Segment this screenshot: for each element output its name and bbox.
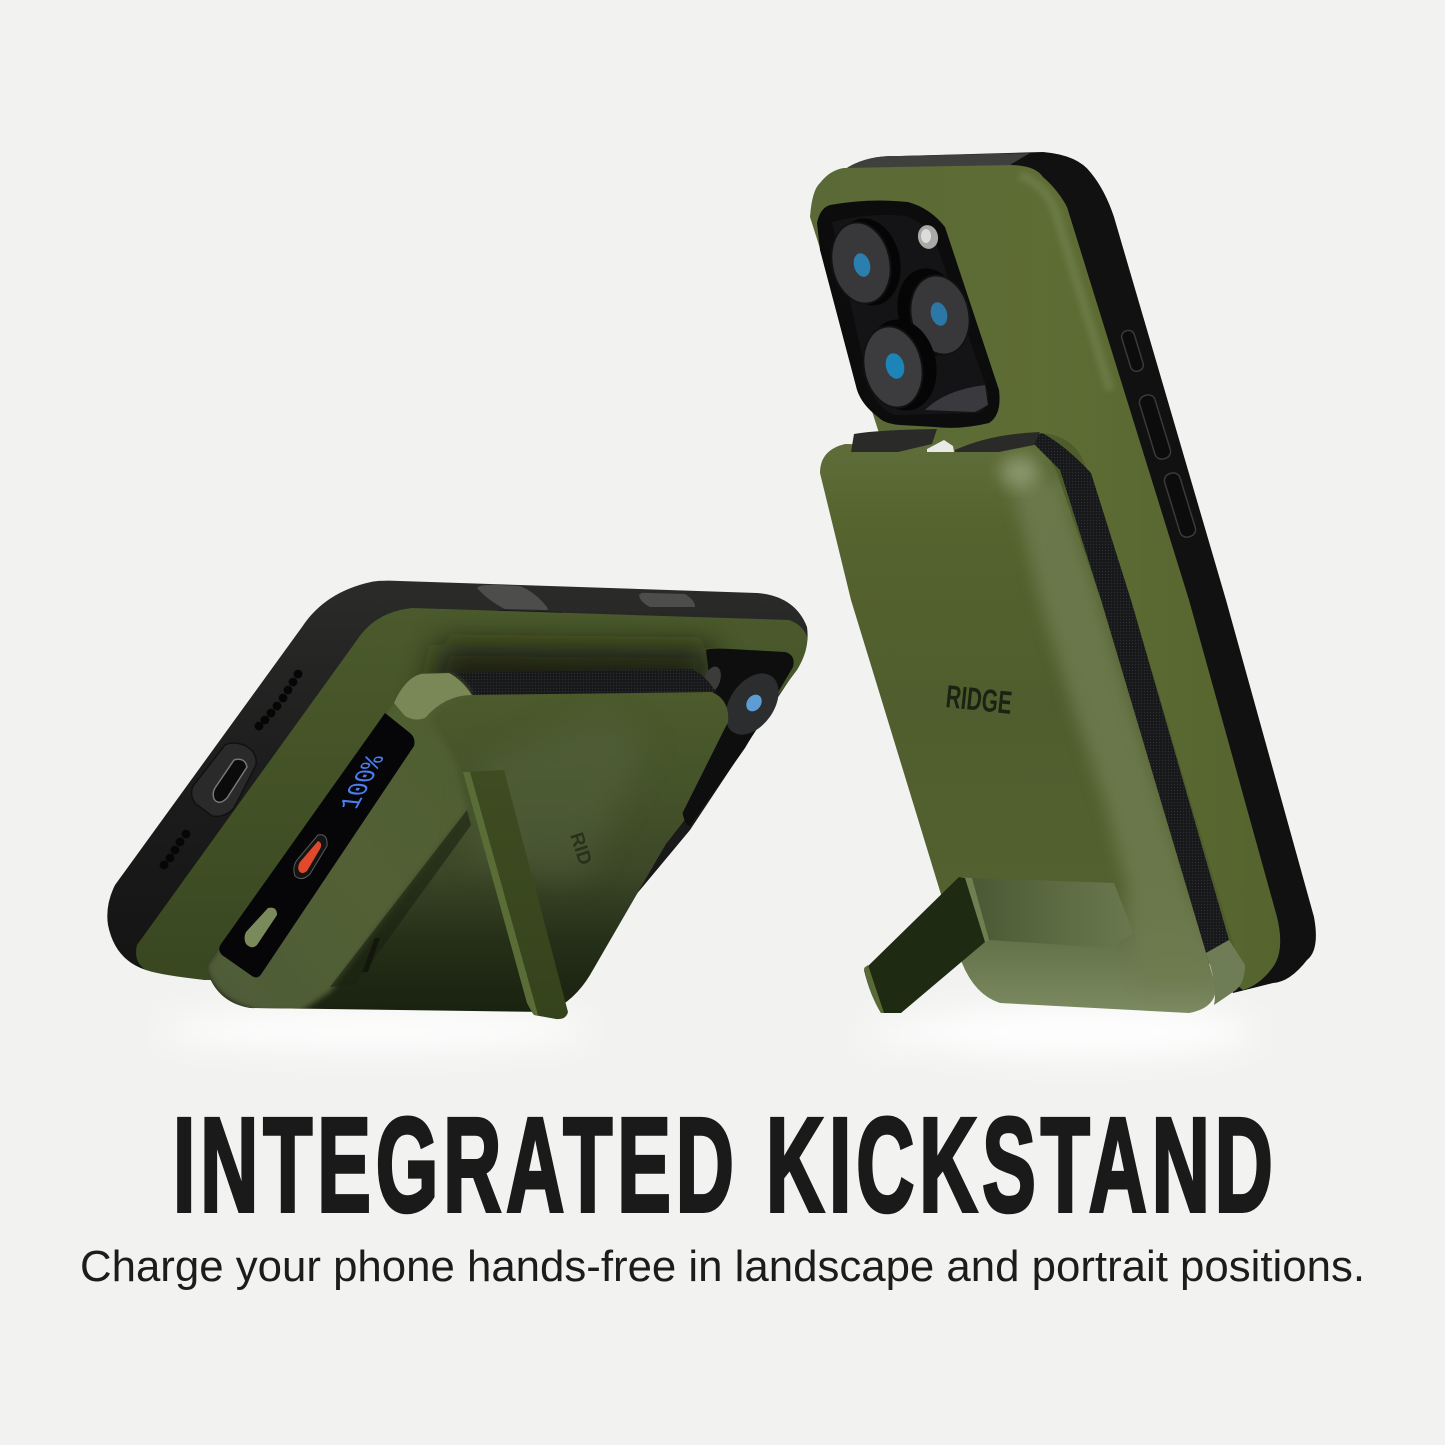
recess slot <box>330 810 471 987</box>
infographic canvas <box>82 152 1362 1290</box>
red usb-c port <box>294 835 327 879</box>
kickstand leg, landscape <box>463 770 568 1019</box>
bottom edge ports <box>160 670 302 869</box>
phone side buttons <box>1120 329 1197 539</box>
fabric strip, portrait <box>1028 433 1229 953</box>
green button <box>244 908 277 947</box>
fabric strip <box>449 669 716 696</box>
corner highlight <box>394 673 472 720</box>
kickstand hinge <box>959 877 989 942</box>
title: INTEGRATED KICKSTAND <box>173 1091 1273 1240</box>
display panel <box>219 713 414 977</box>
landscape device <box>107 581 808 1019</box>
bank side band <box>206 673 472 1012</box>
face highlight <box>504 738 622 867</box>
usb-c port, phone <box>192 743 256 816</box>
corner highlight <box>1000 456 1040 488</box>
clips and latch <box>851 429 1040 452</box>
ridge logo: RIDGE <box>944 678 1014 721</box>
green phone case, portrait <box>810 165 1280 990</box>
faded logo: RID <box>565 830 595 868</box>
green phone case <box>136 608 807 982</box>
phone bumper, landscape <box>107 581 808 980</box>
bank highlight band <box>1010 480 1212 985</box>
glass reflection <box>925 385 988 412</box>
bottom end cap <box>1206 940 1245 1005</box>
case shadow behind bank <box>425 645 715 710</box>
lens 2 <box>890 262 977 362</box>
subtitle: Charge your phone hands-free in landscape and portrait positions. <box>80 1242 1365 1291</box>
camera module, portrait <box>817 201 1000 428</box>
lens 3 <box>856 313 945 417</box>
lens 1 <box>824 212 908 312</box>
phone bumper, portrait <box>844 152 1316 993</box>
bank side band <box>1042 433 1240 1000</box>
recess notch <box>362 938 380 972</box>
flash <box>916 223 940 251</box>
speaker holes bottom <box>160 830 190 869</box>
camera module, landscape <box>680 649 794 826</box>
bank rear face, portrait <box>820 444 1216 1013</box>
portrait device <box>810 152 1316 1013</box>
battery readout: 100% <box>333 754 393 811</box>
case highlight <box>1020 175 1110 390</box>
power bank, landscape <box>206 669 728 1012</box>
kickstand recess <box>972 878 1133 948</box>
bank rear face <box>206 692 728 1012</box>
floor reflection <box>160 1008 1255 1056</box>
kickstand leg, portrait <box>864 877 985 1013</box>
side buttons <box>477 585 695 618</box>
top edge highlight <box>844 153 1030 170</box>
speaker holes top <box>255 670 302 730</box>
